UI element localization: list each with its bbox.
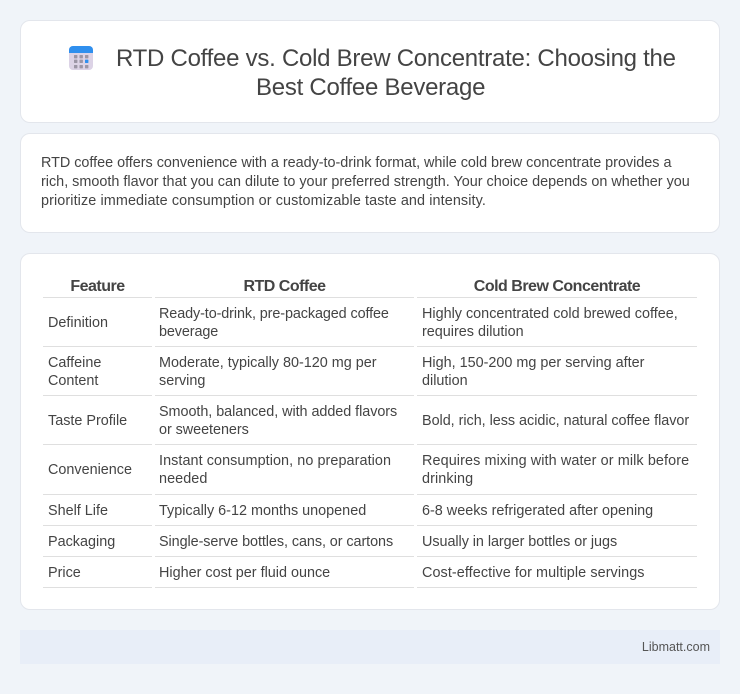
summary text: prioritize immediate consumption or customizable taste and intensity. <box>41 193 486 209</box>
row: definition: Highly concentrated cold brewed coffee, <box>422 306 678 322</box>
row: convenience <box>48 453 689 487</box>
row: caffeine content: serving <box>159 373 205 389</box>
table header <box>70 278 640 295</box>
footer bar <box>20 630 720 664</box>
row: definition: requires dilution <box>422 324 524 340</box>
table header: RTD Coffee <box>243 278 326 295</box>
title: Best Coffee Beverage <box>256 74 485 101</box>
row: definition <box>48 306 678 340</box>
row: shelf life <box>48 503 653 519</box>
row: taste profile: Bold, rich, less acidic, natural coffee flavor <box>422 413 689 429</box>
row: shelf life: Typically 6-12 months unopened <box>159 503 366 519</box>
row: convenience: Instant consumption, no preparation <box>159 453 391 469</box>
row: definition: beverage <box>159 324 218 340</box>
row: definition: Ready-to-drink, pre-packaged coffee <box>159 306 389 322</box>
row: price: Cost-effective for multiple servings <box>422 565 645 581</box>
row: price <box>48 565 645 581</box>
row: packaging: Usually in larger bottles or jugs <box>422 534 617 550</box>
row: taste profile <box>48 404 689 438</box>
footer credit: Libmatt.com <box>642 640 710 654</box>
title <box>116 45 676 101</box>
row: convenience: drinking <box>422 471 473 487</box>
row: convenience: Requires mixing with water or milk before <box>422 453 689 469</box>
icon: calendar <box>69 46 93 70</box>
row: taste profile: Taste Profile <box>48 413 127 429</box>
row: taste profile: or sweeteners <box>159 422 249 438</box>
summary text: RTD coffee offers convenience with a ready-to-drink format, while cold brew concentrate provides a <box>41 155 671 171</box>
row: price: Higher cost per fluid ounce <box>159 565 330 581</box>
title: RTD Coffee vs. Cold Brew Concentrate: Choosing the <box>116 45 676 72</box>
row: caffeine content: High, 150-200 mg per serving after <box>422 355 644 371</box>
row: caffeine content: Moderate, typically 80-120 mg per <box>159 355 377 371</box>
summary text: rich, smooth flavor that you can dilute to your preferred strength. Your choice depends on whether you <box>41 174 690 190</box>
summary text <box>41 155 690 209</box>
table header: Cold Brew Concentrate <box>474 278 640 295</box>
panel: title card <box>20 20 720 123</box>
row: packaging: Packaging <box>48 534 115 550</box>
row: caffeine content: Content <box>48 373 98 389</box>
row: packaging <box>48 534 617 550</box>
panel: summary card <box>20 133 720 233</box>
panel: comparison table card <box>20 253 720 610</box>
row: shelf life: 6-8 weeks refrigerated after opening <box>422 503 653 519</box>
row: caffeine content: dilution <box>422 373 468 389</box>
row: taste profile: Smooth, balanced, with added flavors <box>159 404 397 420</box>
row: convenience: needed <box>159 471 207 487</box>
table header: Feature <box>70 278 125 295</box>
row: definition: Definition <box>48 315 108 331</box>
comparison table <box>43 278 697 588</box>
row: price: Price <box>48 565 81 581</box>
row: convenience: Convenience <box>48 462 132 478</box>
row: caffeine content: Caffeine <box>48 355 101 371</box>
row: shelf life: Shelf Life <box>48 503 108 519</box>
row: packaging: Single-serve bottles, cans, or cartons <box>159 534 393 550</box>
row: caffeine content <box>48 355 644 389</box>
